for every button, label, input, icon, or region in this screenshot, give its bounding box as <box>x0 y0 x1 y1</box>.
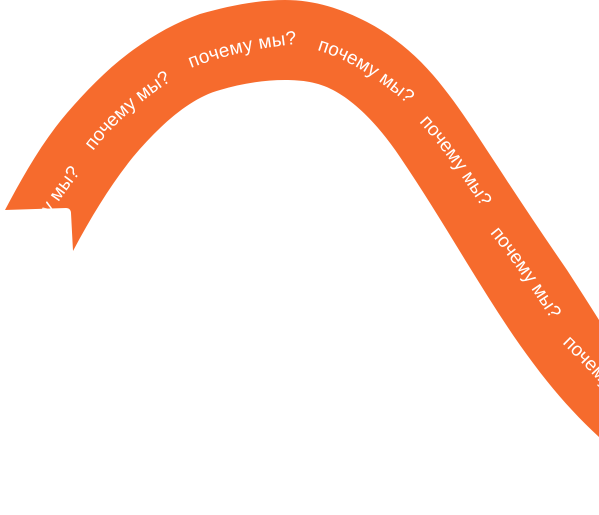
repeated label 4: почему мы? <box>318 40 414 101</box>
repeated label 3: почему мы? <box>188 31 296 68</box>
ribbon text <box>42 31 599 387</box>
repeated label 5: почему мы? <box>420 116 492 204</box>
repeated label 1: почему мы? <box>42 166 78 209</box>
repeated label 2: почему мы? <box>86 71 168 150</box>
repeated label 6: почему мы? <box>490 228 561 316</box>
